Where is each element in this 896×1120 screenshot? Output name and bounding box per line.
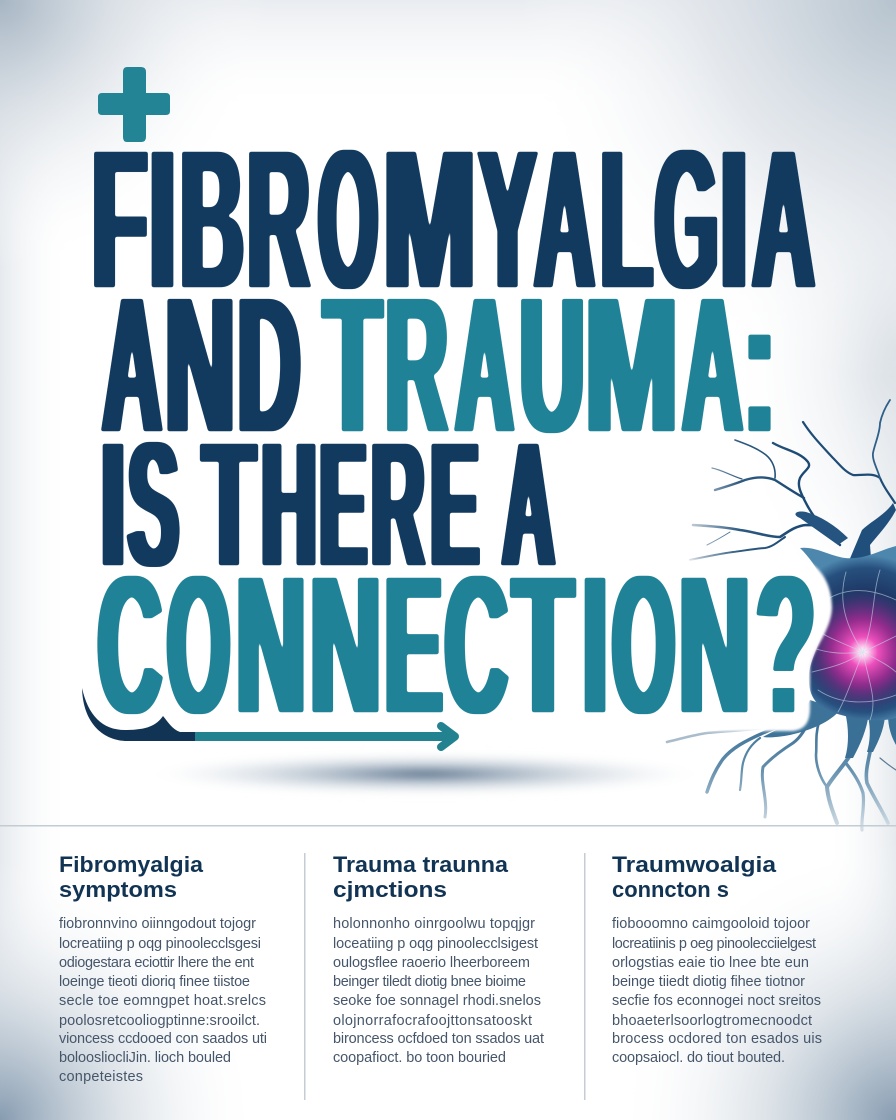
title line 1: R	[247, 108, 310, 331]
title line 2: and: A	[103, 256, 161, 474]
title line 4: E	[385, 534, 442, 756]
underline swoosh and arrow	[82, 688, 455, 747]
body text: fiobooomno caimgooloid tojoor	[612, 916, 810, 932]
text: A	[753, 108, 814, 331]
title line 1: G	[655, 108, 718, 331]
title line 2: trauma: :	[743, 256, 776, 474]
column divider 1	[304, 853, 306, 1100]
illustration: neuron	[667, 400, 896, 830]
heading	[59, 852, 203, 902]
horizontal divider	[0, 825, 896, 826]
title line 2: trauma: M	[585, 256, 678, 474]
ground shadow under title	[135, 752, 715, 796]
title line 4: N	[310, 534, 381, 756]
body text: orlogstias eaie tio lnee bte eun	[612, 955, 809, 971]
panel: traumwoalgia connections	[612, 852, 822, 1066]
title: A	[503, 405, 554, 605]
title line 4: O	[167, 534, 230, 756]
body text: poolosretcooliogptinne:srooilct.	[59, 1013, 260, 1029]
heading: cjmctions	[333, 877, 447, 902]
heading: symptoms	[59, 877, 177, 902]
text: ?	[756, 534, 815, 756]
swoosh	[82, 688, 196, 741]
title line 2: trauma: A	[683, 256, 742, 474]
body text: locreatiinis p oeg pinoolecciielgest	[612, 936, 816, 952]
body text: coopafioct. bo toon bouried	[333, 1050, 506, 1066]
title line 2: trauma: T	[324, 256, 381, 474]
body text: conpeteistes	[59, 1069, 143, 1085]
heading: conncton s	[612, 877, 729, 902]
title line 1: O	[318, 108, 378, 331]
body text	[612, 916, 822, 1066]
title line 1: A	[535, 108, 594, 331]
cell glow	[803, 590, 896, 714]
title line 2: trauma: U	[520, 256, 584, 474]
title line 3: T	[203, 405, 255, 605]
body text: fiobronnvino oiinngodout tojogr	[59, 916, 256, 932]
upper dendrites	[690, 440, 845, 560]
title line 1: Y	[479, 108, 536, 331]
title line 1: F	[92, 108, 147, 331]
body text: odiogestara eciottir lhere the ent	[59, 955, 254, 971]
title line 4: C	[98, 534, 162, 756]
title line 3: E	[320, 405, 367, 605]
body text: loceatiing p oqg pinoolecclsigest	[333, 936, 538, 952]
column divider 2	[584, 853, 586, 1100]
lower dendrites	[707, 712, 896, 830]
body text: secfie fos econnogei noct sreitos	[612, 993, 821, 1009]
title line 1: I	[720, 108, 748, 331]
heading	[612, 852, 777, 902]
body text: brocess ocdored ton esados uis	[612, 1031, 822, 1047]
body text: boloosliocliJin. lioch bouled	[59, 1050, 231, 1066]
body text: bironcess ocfdoed ton ssados uat	[333, 1031, 544, 1047]
body text: loeinge tieoti dioriq finee tiistoe	[59, 974, 250, 990]
body text	[333, 916, 544, 1066]
body text: olojnorrafocrafoojttonsatooskt	[333, 1013, 532, 1029]
heading: Trauma traunna	[333, 852, 509, 877]
title line 2: and: N	[165, 256, 235, 474]
title line 4: N	[679, 534, 750, 756]
title line 4: O	[612, 534, 675, 756]
title line 1: M	[383, 108, 476, 331]
body text: oulogsflee raoerio lheerboreem	[333, 955, 530, 971]
body text: beinger tiledt diotig bnee bioime	[333, 974, 526, 990]
icon: medical plus	[98, 67, 170, 142]
title line 4: C	[445, 534, 508, 756]
title line 3: I	[101, 405, 125, 605]
title line 3: S	[128, 405, 179, 605]
cell body	[800, 546, 896, 720]
title line 1: B	[180, 108, 244, 331]
body text: seoke foe sonnagel rhodi.snelos	[333, 993, 541, 1009]
body text: vioncess ccdooed con saados uti	[59, 1031, 267, 1047]
panel: trauma connections	[333, 852, 544, 1066]
title line 4: N	[236, 534, 306, 756]
title line 3: E	[431, 405, 479, 605]
arrow line	[195, 732, 453, 741]
cell filaments	[812, 570, 896, 720]
body text	[59, 916, 267, 1085]
body text: secle toe eomngpet hoat.srelcs	[59, 993, 266, 1009]
body text: beinge tiiedt diotig fihee tiotnor	[612, 974, 805, 990]
body text: locreatiing p oqg pinoolecclsgesi	[59, 936, 261, 952]
white sticker outline behind title	[82, 560, 832, 731]
panel: fibromyalgia symptoms	[59, 852, 267, 1085]
title: D	[238, 256, 300, 474]
title line 4: T	[513, 534, 573, 756]
title	[92, 108, 815, 756]
title line 3: H	[261, 405, 317, 605]
title line 1: L	[600, 108, 652, 331]
arrow head	[441, 726, 455, 747]
heading: Fibromyalgia	[59, 852, 203, 877]
body text: bhoaeterlsoorlogtromecnoodct	[612, 1013, 812, 1029]
title line 2: trauma: R	[385, 256, 448, 474]
body text: holonnonho oinrgoolwu topqjgr	[333, 916, 535, 932]
heading: Traumwoalgia	[612, 852, 777, 877]
title line 1: I	[149, 108, 176, 331]
body text: coopsaiocl. do tiout bouted.	[612, 1050, 785, 1066]
heading	[333, 852, 509, 902]
title line 4: I	[583, 534, 607, 756]
title line 3: R	[371, 405, 424, 605]
title line 2: trauma: A	[456, 256, 513, 474]
